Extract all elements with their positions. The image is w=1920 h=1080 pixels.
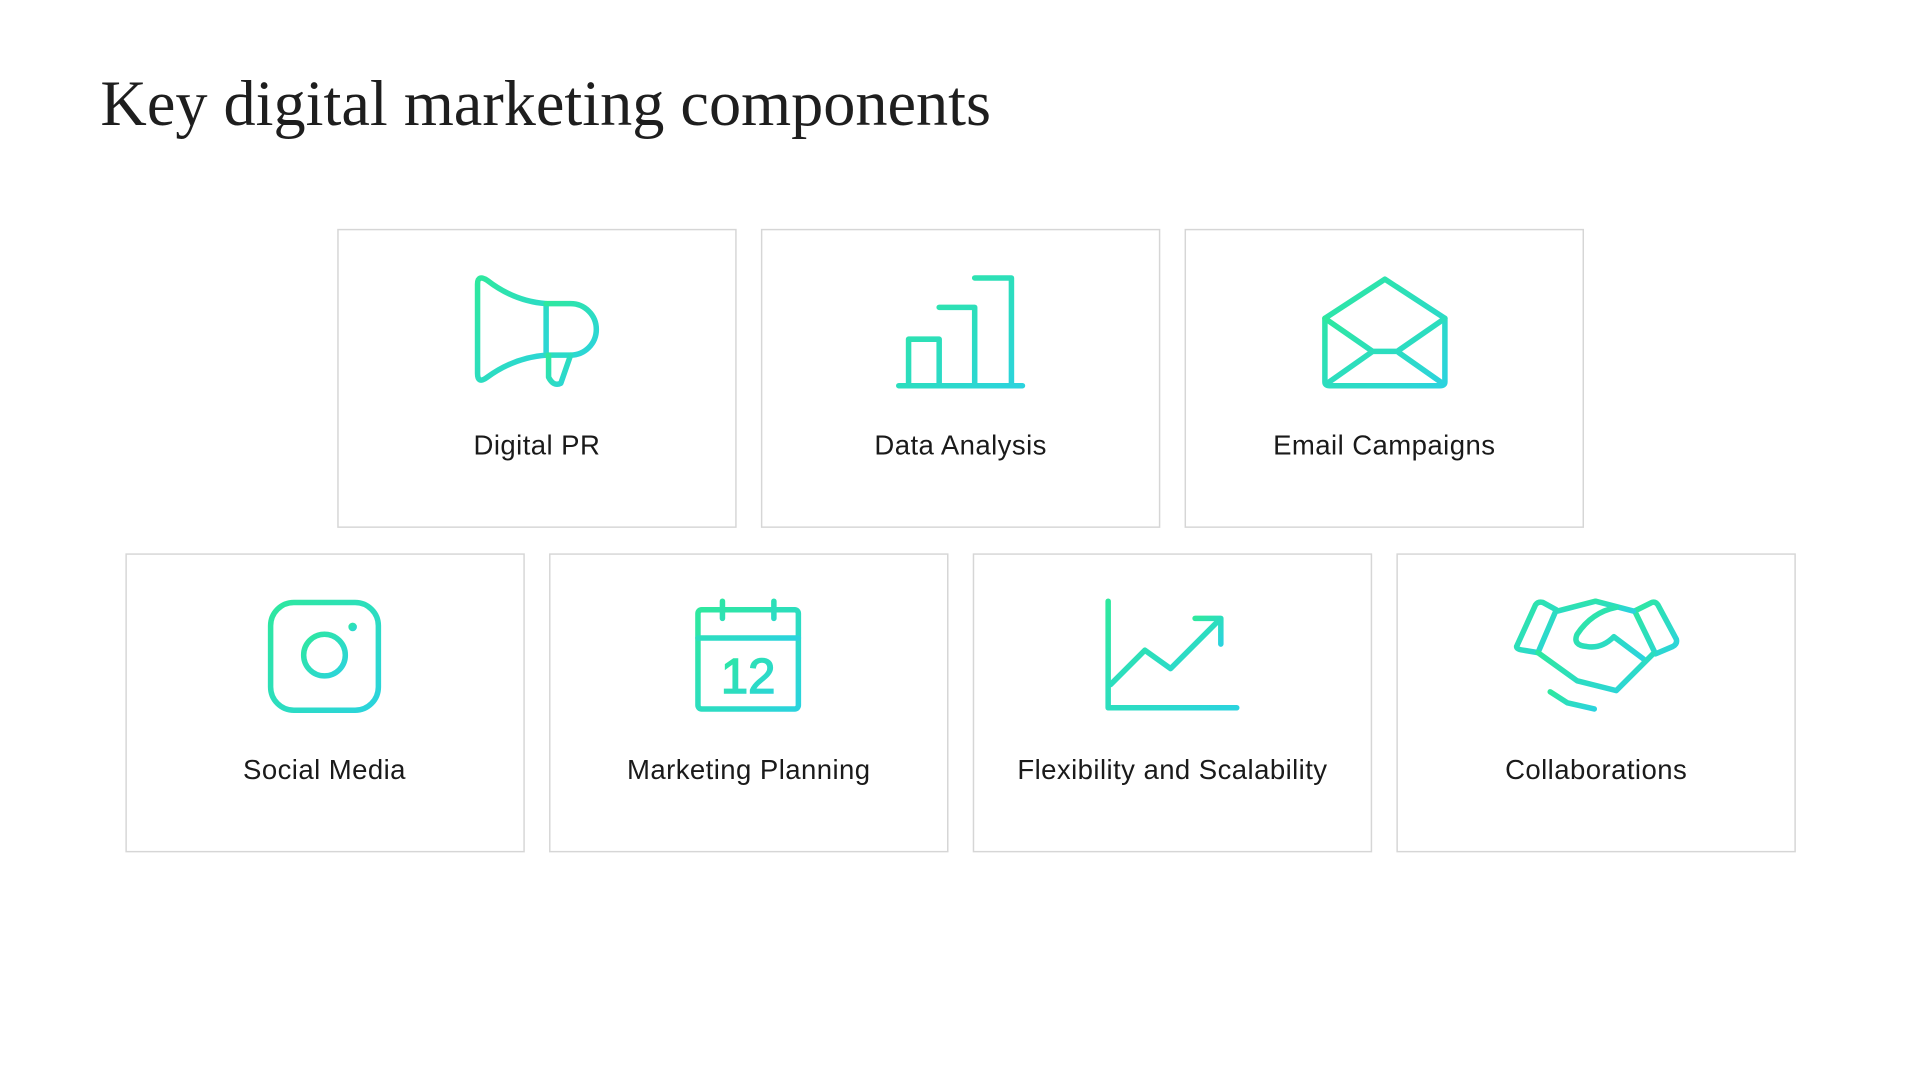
icon: calendar [698,601,798,709]
card: Collaborations [1397,554,1795,852]
label: Marketing Planning [627,754,871,785]
label: Social Media [243,754,406,785]
label: Email Campaigns [1273,429,1495,460]
icon: instagram [271,602,378,710]
label: Flexibility and Scalability [1017,754,1328,785]
icon: megaphone [478,278,596,384]
card: Digital PR [338,230,736,527]
icon: growth chart [1108,601,1237,708]
card: Flexibility and Scalability [973,554,1371,852]
icon: calendar: 12 [721,650,775,704]
icon: handshake [1517,601,1677,709]
label: Data Analysis [874,429,1047,460]
icon: bar chart [899,278,1022,386]
icon: envelope [1325,279,1445,386]
label: Collaborations [1505,754,1687,785]
card: Social Media [126,554,524,852]
card: Email Campaigns [1185,230,1583,527]
card: Marketing Planning [550,554,948,852]
title: Key digital marketing components [100,68,991,139]
card: Data Analysis [762,230,1160,527]
label: Digital PR [474,429,600,460]
